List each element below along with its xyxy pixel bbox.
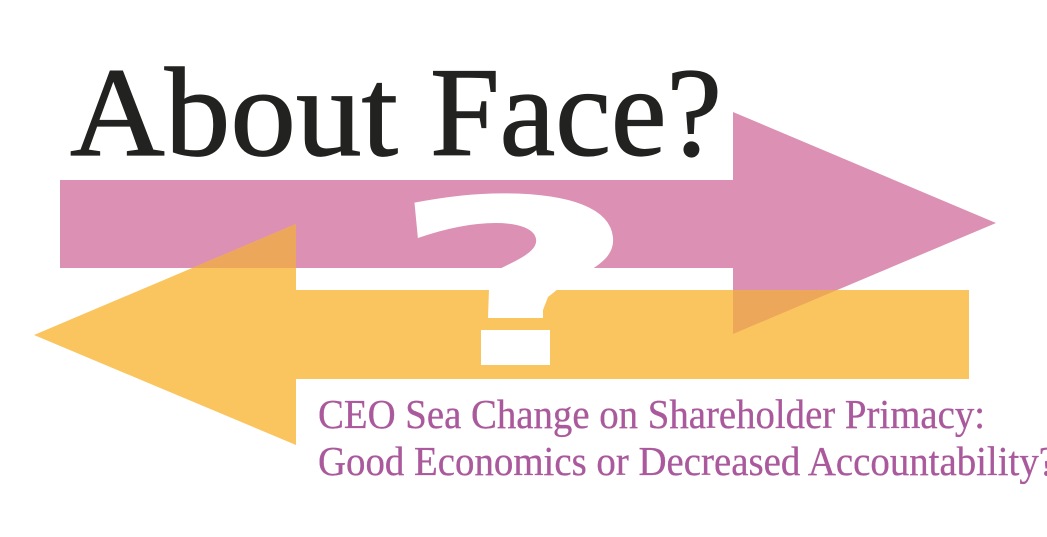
arrow overlap: left xyxy=(192,224,296,268)
question mark dot xyxy=(481,330,550,365)
subtitle line 1: CEO Sea Change on Shareholder Primacy: xyxy=(318,391,985,437)
icon: large white question mark xyxy=(379,150,659,420)
title word: About: About xyxy=(70,43,398,183)
question mark stem xyxy=(488,289,558,318)
title xyxy=(70,43,722,183)
arrow: pink pointing right xyxy=(60,112,996,334)
subtitle xyxy=(318,391,1047,484)
arrow overlap: right xyxy=(733,290,837,334)
arrow: orange pointing left xyxy=(34,224,969,445)
title word: Face?: Face? xyxy=(430,43,722,183)
question mark glyph: ? xyxy=(379,150,659,420)
